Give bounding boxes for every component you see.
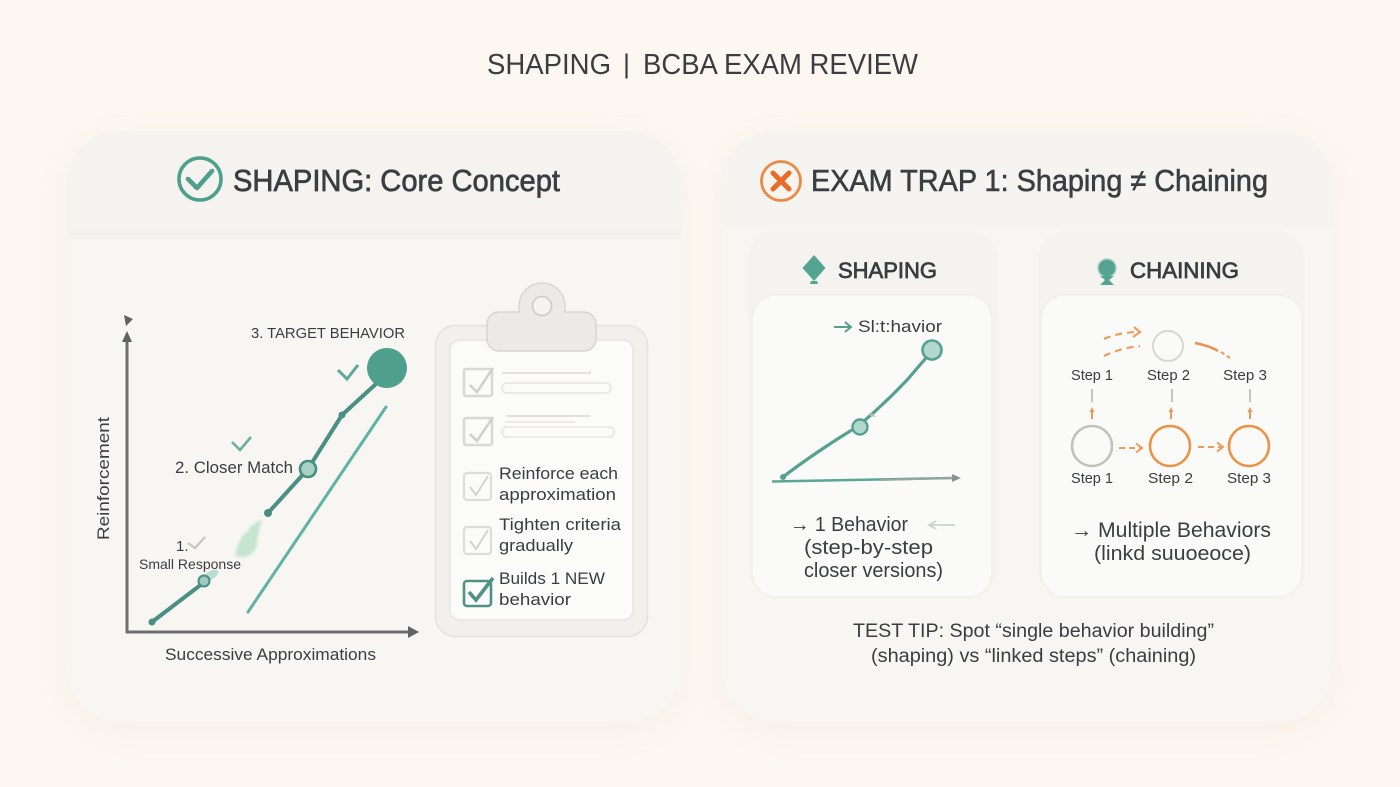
axis label: successive approximations: Successive Approximations: [165, 646, 376, 664]
vertical connectors: [1090, 389, 1252, 419]
icon: check circle: [179, 158, 221, 200]
step 1 segment: [148, 568, 220, 626]
chain diagram: [1071, 327, 1271, 487]
checklist item 4: Tighten criteria: [499, 515, 622, 534]
sub-panel: chaining: [1038, 230, 1305, 598]
checklist item 5: Builds 1 NEW: [499, 569, 605, 588]
test tip: TEST TIP: Spot “single behavior building”: [853, 621, 1214, 642]
checklist item 5: behavior: [499, 590, 571, 609]
label: target behavior: 3. TARGET BEHAVIOR: [251, 325, 405, 342]
bottom step labels: Step 3: [1227, 470, 1271, 487]
test tip: [853, 621, 1214, 667]
text: one behavior: [790, 514, 943, 582]
top step labels: Step 3: [1223, 367, 1267, 384]
label: small response: [139, 538, 241, 572]
title: SHAPING: [487, 49, 611, 81]
text: multiple behaviors: → Multiple Behaviors: [1071, 519, 1271, 542]
top node: [1153, 331, 1183, 361]
checklist item 5: [464, 569, 605, 609]
y axis: [122, 315, 133, 633]
checklist item 2 placeholder: [464, 416, 614, 445]
title: BCBA EXAM REVIEW: [643, 49, 919, 81]
check 1: [188, 537, 205, 548]
smudge between steps: [235, 520, 262, 557]
arrow: step 2 to 3: [1198, 442, 1223, 452]
line chart: shaping: [772, 340, 961, 482]
icon: x circle: [762, 162, 800, 200]
text: multiple behaviors: (linkd suuoeoce): [1094, 543, 1251, 565]
target behavior node: [367, 348, 407, 388]
bottom step labels: [1071, 470, 1271, 487]
checklist item 4: [464, 515, 622, 555]
top dashed arrows: [1104, 327, 1230, 358]
check 2: [232, 437, 251, 450]
label: behavior: Sl:t:havior: [858, 317, 942, 336]
label: closer match: 2. Closer Match: [175, 459, 293, 477]
checklist item 4: gradually: [499, 536, 574, 555]
icon: pin: [1098, 259, 1116, 285]
arrow: step 1 to 2: [1119, 444, 1142, 452]
step 2 segment: [264, 383, 377, 517]
text: one behavior: (step-by-step: [804, 537, 933, 559]
checklist item 3: [464, 464, 618, 504]
x axis: [126, 626, 419, 638]
heading: shaping: SHAPING: [838, 258, 937, 283]
heading: core concept: SHAPING: Core Concept: [233, 163, 560, 198]
bottom step labels: Step 2: [1148, 470, 1193, 487]
clipboard checklist: [436, 283, 648, 636]
chart: successive approximations: [94, 315, 419, 664]
heading: chaining: CHAINING: [1130, 258, 1239, 283]
bottom step labels: Step 1: [1071, 470, 1113, 487]
clipboard paper: [450, 340, 633, 620]
checklist item 1 placeholder: [464, 368, 611, 396]
panel: exam trap: [748, 160, 1305, 666]
arrow: to behavior label: [834, 322, 851, 332]
label: small response: Small Response: [139, 556, 241, 572]
panel: shaping core concept: [67, 131, 681, 664]
step node 1: [1072, 426, 1112, 466]
sub-panel: shaping: [748, 230, 998, 598]
top step labels: [1071, 367, 1267, 384]
arrow: faint left: [929, 521, 955, 529]
heading: exam trap: EXAM TRAP 1: Shaping ≠ Chaining: [811, 163, 1268, 198]
axis label: reinforcement: Reinforcement: [94, 417, 113, 540]
test tip: (shaping) vs “linked steps” (chaining): [871, 646, 1196, 667]
clipboard board: [436, 326, 648, 636]
checklist item 3: Reinforce each: [499, 464, 618, 483]
title: [487, 49, 919, 81]
text: one behavior: closer versions): [804, 560, 943, 582]
top step labels: Step 2: [1147, 367, 1190, 384]
check 3: [338, 365, 358, 379]
text: one behavior: → 1 Behavior: [790, 514, 908, 536]
step node 2: [1150, 426, 1190, 466]
checklist item 3: approximation: [499, 485, 616, 504]
clipboard clip: [487, 283, 596, 351]
top step labels: Step 1: [1071, 367, 1113, 384]
reference trend line: [248, 407, 386, 612]
text: multiple behaviors: [1071, 519, 1271, 565]
icon: diamond: [802, 255, 826, 284]
label: small response: 1.: [176, 538, 189, 555]
title: |: [623, 49, 630, 79]
step node 3: [1229, 426, 1269, 466]
